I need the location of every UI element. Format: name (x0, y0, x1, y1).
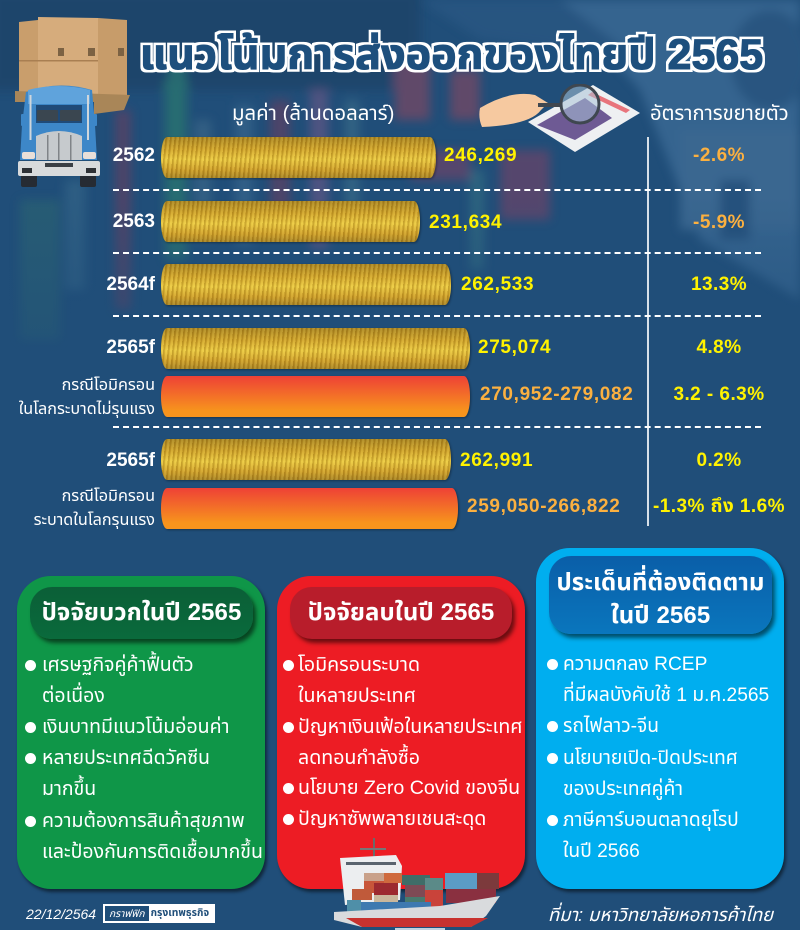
row mild omicron rate: 3.2 - 6.3% (673, 384, 765, 405)
divider line (647, 137, 649, 526)
positive heading (30, 587, 253, 639)
positive list (25, 651, 263, 863)
watch list: ความตกลง RCEP (563, 654, 707, 675)
watch heading: ประเด็นที่ต้องติดตาม (556, 569, 765, 596)
row 2565f label: 2565f (106, 337, 155, 358)
negative list: ปัญหาเงินเฟ้อในหลายประเทศ (298, 716, 523, 738)
negative list: ในหลายประเทศ (298, 685, 416, 707)
row 2565f rate: 4.8% (696, 337, 742, 358)
negative heading (290, 587, 512, 639)
heading: growth column: อัตราการขยายตัว (650, 103, 789, 125)
negative list: นโยบาย Zero Covid ของจีน (298, 777, 520, 799)
row 2563 label: 2563 (113, 211, 155, 232)
icon: container ship (334, 838, 500, 930)
negative heading: ปัจจัยลบในปี 2565 (308, 599, 494, 626)
row 2565f severe bar (161, 439, 451, 480)
row 2565f value: 275,074 (478, 337, 551, 358)
background: blurred candlesticks and banknotes (0, 0, 800, 312)
icon: truck with cartons (15, 17, 130, 187)
row 2563 bar (161, 201, 420, 242)
heading: value column: มูลค่า (ล้านดอลลาร์) (232, 103, 394, 125)
row severe omicron rate: -1.3% ถึง 1.6% (653, 496, 785, 517)
row 2562 label: 2562 (113, 145, 155, 166)
negative list: โอมิครอนระบาด (298, 654, 420, 676)
row mild omicron bar (161, 376, 470, 417)
positive list: เงินบาทมีแนวโน้มอ่อนค่า (42, 716, 230, 738)
panel: issues to watch (536, 548, 784, 889)
title: แนวโน้มการส่งออกของไทยปี 2565 (140, 31, 763, 79)
row 2564f label: 2564f (106, 274, 155, 295)
logo: graphic credit: กราฟฟิก (109, 909, 145, 920)
watch list (547, 654, 769, 862)
watch list: ของประเทศคู่ค้า (563, 779, 683, 800)
positive list: และป้องกันการติดเชื้อมากขึ้น (42, 841, 263, 863)
positive list: เศรษฐกิจคู่ค้าฟื้นตัว (42, 654, 194, 676)
row severe omicron label: กรณีโอมิครอน (62, 487, 155, 505)
watch list: รถไฟลาว-จีน (563, 716, 659, 737)
row 2563 value: 231,634 (429, 212, 502, 233)
watch heading (549, 556, 772, 634)
negative list: ปัญหาซัพพลายเชนสะดุด (298, 808, 486, 830)
positive list: ต่อเนื่อง (42, 685, 105, 707)
row 2562 bar (161, 137, 436, 178)
watch heading: ในปี 2565 (611, 602, 710, 629)
row severe omicron label: ระบาดในโลกรุนแรง (34, 511, 155, 529)
logo: graphic credit (103, 904, 215, 923)
icon: hand with magnifier over report (479, 84, 640, 152)
watch list: ในปี 2566 (563, 841, 640, 862)
row mild omicron value: 270,952-279,082 (480, 384, 633, 405)
row 2564f rate: 13.3% (691, 274, 747, 295)
positive list: มากขึ้น (42, 778, 96, 800)
row 2564f bar (161, 264, 451, 305)
row mild omicron label (19, 376, 155, 418)
row 2564f value: 262,533 (461, 274, 534, 295)
row 2565f severe label: 2565f (106, 450, 155, 471)
positive list: ความต้องการสินค้าสุขภาพ (42, 810, 245, 832)
watch list: ภาษีคาร์บอนตลาดยุโรป (563, 810, 739, 831)
date: 22/12/2564 (26, 906, 96, 922)
panel: negative factors (277, 576, 525, 889)
panel: positive factors (17, 576, 265, 889)
logo: graphic credit: กรุงเทพธุรกิจ (151, 908, 209, 919)
row 2565f bar (161, 328, 470, 369)
positive list: หลายประเทศฉีดวัคซีน (42, 747, 210, 769)
row severe omicron label (34, 487, 155, 529)
row 2562 rate: -2.6% (693, 145, 745, 166)
negative list: ลดทอนกำลังซื้อ (298, 747, 420, 769)
positive heading: ปัจจัยบวกในปี 2565 (42, 599, 241, 626)
row severe omicron value: 259,050-266,822 (467, 496, 620, 517)
row 2563 rate: -5.9% (693, 212, 745, 233)
negative list (283, 654, 523, 830)
row mild omicron label: กรณีโอมิครอน (62, 376, 155, 394)
row 2565f severe rate: 0.2% (696, 450, 742, 471)
row 2562 value: 246,269 (444, 145, 517, 166)
watch list: ที่มีผลบังคับใช้ 1 ม.ค.2565 (563, 685, 769, 706)
source: ที่มา: มหาวิทยาลัยหอการค้าไทย (548, 904, 773, 925)
row severe omicron bar (161, 488, 458, 529)
row mild omicron label: ในโลกระบาดไม่รุนแรง (19, 400, 155, 418)
row 2565f severe value: 262,991 (460, 450, 533, 471)
watch list: นโยบายเปิด-ปิดประเทศ (563, 748, 738, 769)
